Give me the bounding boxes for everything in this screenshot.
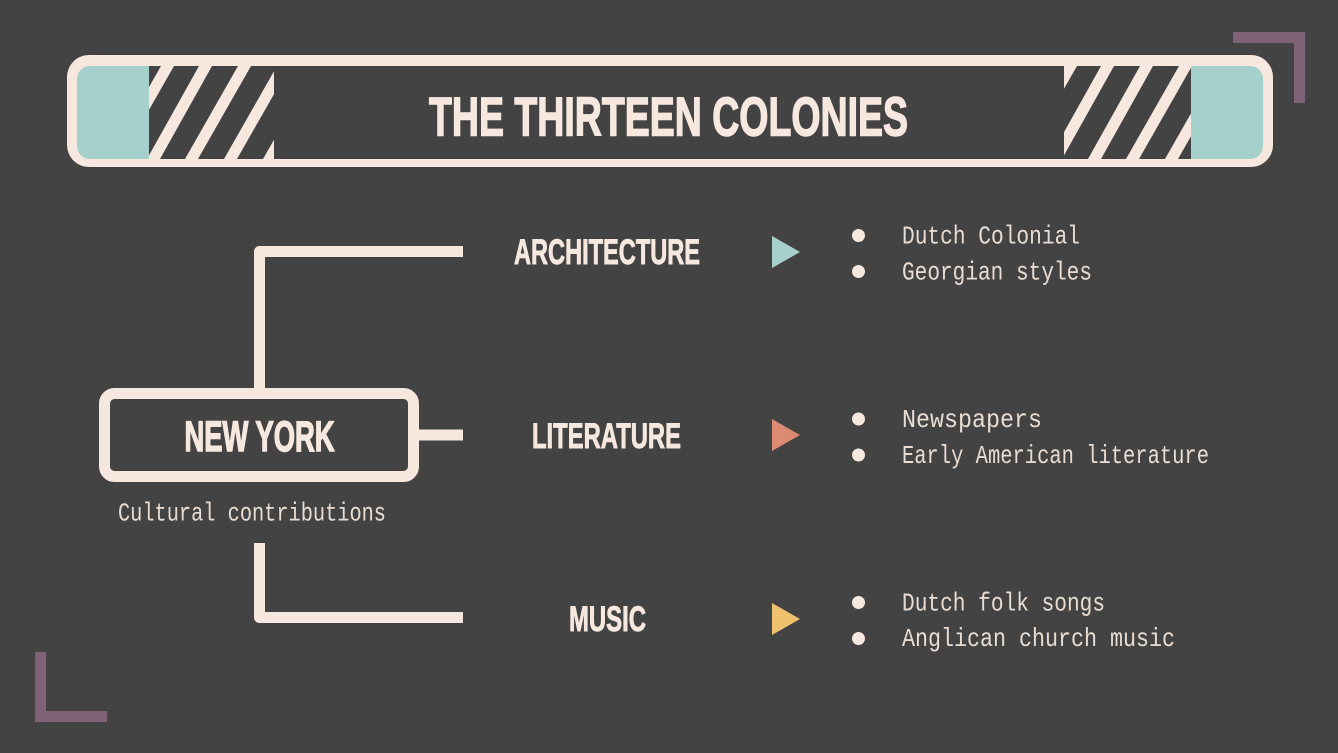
bullet list: music: Anglican church music — [902, 624, 1175, 654]
arrow: coral — [772, 419, 800, 451]
heading: architecture: ARCHITECTURE — [514, 233, 700, 272]
corner bracket: top right — [1233, 38, 1300, 103]
caption: cultural contributions: Cultural contributions — [118, 498, 386, 528]
bullet list: literature — [852, 405, 1209, 471]
heading: literature: LITERATURE — [532, 417, 681, 456]
arrow: teal — [772, 236, 800, 268]
corner bracket: bottom left — [40, 652, 107, 716]
connector: to music — [260, 543, 463, 618]
row: music — [569, 588, 1175, 654]
row: architecture — [514, 222, 1092, 288]
heading: music: MUSIC — [569, 600, 646, 639]
bullet list: architecture — [852, 222, 1092, 288]
heading: New York: NEW YORK — [184, 413, 334, 461]
connector: to literature — [415, 430, 463, 440]
stripes: right — [1064, 66, 1191, 159]
title: THE THIRTEEN COLONIES — [429, 86, 908, 148]
box: New York — [104, 394, 414, 476]
bullet list: literature: Newspapers — [902, 405, 1042, 435]
bullet list: literature: Early American literature — [902, 441, 1209, 471]
row: literature — [532, 405, 1209, 471]
title banner — [67, 55, 1273, 167]
bullet list: architecture: Dutch Colonial — [902, 222, 1080, 252]
stripes: left — [149, 66, 274, 159]
bullet list: music: Dutch folk songs — [902, 588, 1105, 618]
arrow: yellow — [772, 603, 800, 635]
connector: to architecture — [260, 252, 463, 390]
bullet list: architecture: Georgian styles — [902, 258, 1092, 288]
bullet list: music — [852, 588, 1175, 654]
